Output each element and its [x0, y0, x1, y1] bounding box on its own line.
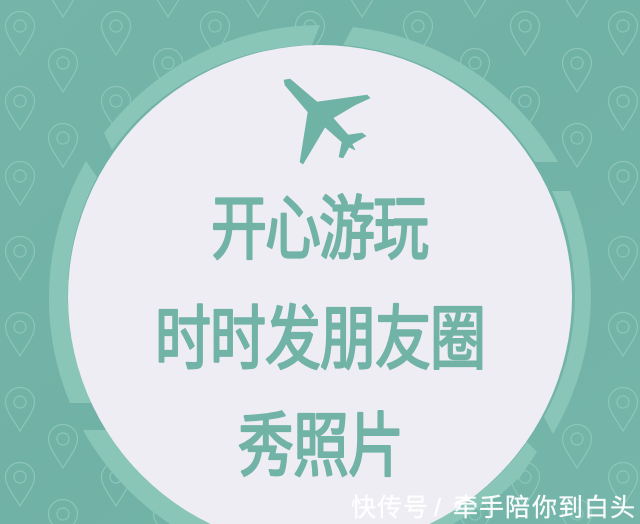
heading line 1	[211, 191, 429, 268]
heading line 2: 圈	[430, 301, 486, 378]
heading line 2: 发	[265, 301, 321, 378]
heading line 2: 友	[375, 301, 431, 378]
heading line 3: 照	[293, 408, 349, 485]
heading line 3: 片	[348, 408, 404, 485]
heading line 1: 玩	[373, 191, 429, 268]
watermark: 快传号/牵手陪你到白头	[351, 494, 635, 522]
heading line 1: 游	[319, 191, 375, 268]
heading line 2: 时	[155, 301, 211, 378]
heading line 2: 朋	[320, 301, 376, 378]
heading line 2	[155, 301, 486, 378]
heading line 2: 时	[210, 301, 266, 378]
heading line 1: 心	[265, 191, 321, 268]
heading line 1: 开	[211, 191, 267, 268]
heading line 3	[238, 408, 404, 485]
heading line 3: 秀	[238, 408, 294, 485]
central circle	[68, 45, 572, 524]
icon: airplane	[284, 79, 370, 164]
